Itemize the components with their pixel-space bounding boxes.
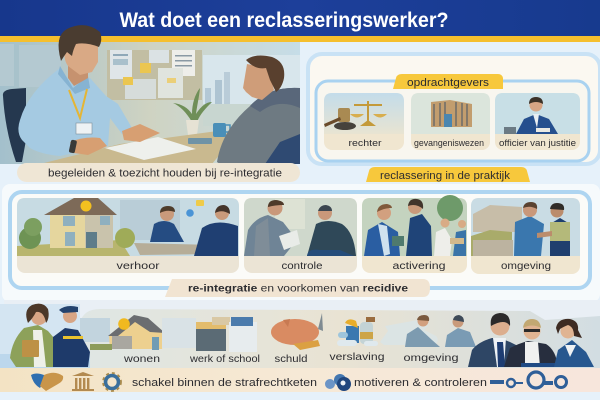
text: schakel binnen de strafrechtketen: schakel binnen de strafrechtketen (132, 377, 317, 389)
card: omgeving: omgeving (501, 261, 551, 272)
icon: handshake (31, 373, 63, 391)
callout: re-integratie en voorkomen van recidive (165, 279, 430, 297)
footer band (0, 368, 600, 392)
panel: bottom re-integration domains (0, 300, 600, 370)
hero panel: caseworker meeting client (0, 25, 300, 164)
text: motiveren & controleren: motiveren & controleren (354, 377, 487, 389)
scene: omgeving gesprek (380, 315, 476, 364)
client (217, 56, 300, 164)
card: activering: activering (392, 261, 446, 272)
tab heading: opdrachtgevers (393, 74, 503, 89)
noticeboard (107, 50, 202, 100)
plant (173, 88, 212, 135)
panel: opdrachtgevers (308, 54, 600, 164)
scene: wonen (80, 315, 165, 365)
scene: verslaving: verslaving (330, 352, 384, 363)
header banner (0, 0, 600, 42)
mug and phone (188, 123, 230, 144)
hero caption (17, 163, 300, 182)
papers (105, 137, 196, 160)
icon: gear (103, 373, 121, 391)
card: gevangeniswezen: gevangeniswezen (414, 137, 484, 148)
card: officier van justitie (495, 93, 580, 150)
icon: courthouse (72, 372, 94, 391)
scene: wonen: wonen (123, 354, 160, 365)
card: activering (362, 195, 467, 273)
scene: verslaving (330, 317, 384, 363)
panel: reclassering in de praktijk (2, 167, 600, 302)
callout: re-integratie en voorkomen van recidive: re-integratie en voorkomen van recidive (188, 284, 408, 294)
scene: werk of school: werk of school (189, 354, 260, 365)
card: controle: controle (282, 261, 323, 272)
scene: omgeving gesprek: omgeving (404, 353, 458, 364)
tab heading: reclassering in de praktijk: reclassering in de praktijk (380, 170, 511, 182)
card: rechter: rechter (348, 138, 382, 149)
tab heading: reclassering in de praktijk (366, 167, 530, 182)
left wall charts (0, 44, 61, 87)
title: Wat doet een reclasseringswerker? (120, 9, 448, 32)
chair left (3, 88, 26, 162)
desk (40, 130, 230, 164)
icon: chain and handcuffs (490, 372, 566, 388)
caseworker (18, 25, 160, 156)
icon: speech bubbles (325, 374, 351, 391)
card: verhoor: verhoor (116, 261, 160, 272)
scene: werk of school (162, 317, 260, 365)
card: verhoor (17, 198, 239, 273)
card: omgeving (471, 198, 580, 274)
window with skyline (203, 55, 300, 126)
scene: schuld: schuld (274, 354, 308, 365)
illustration: three legal professionals (468, 313, 594, 367)
scene: schuld (271, 313, 323, 365)
card: gevangeniswezen (411, 93, 490, 150)
card: rechter (324, 93, 404, 150)
illustration: woman and officer (10, 304, 90, 367)
card: officier van justitie: officier van justitie (499, 138, 576, 148)
card: controle (244, 198, 357, 273)
hero caption: begeleiden & toezicht houden bij re-integratie (48, 168, 282, 180)
tab heading: opdrachtgevers: opdrachtgevers (407, 77, 490, 89)
